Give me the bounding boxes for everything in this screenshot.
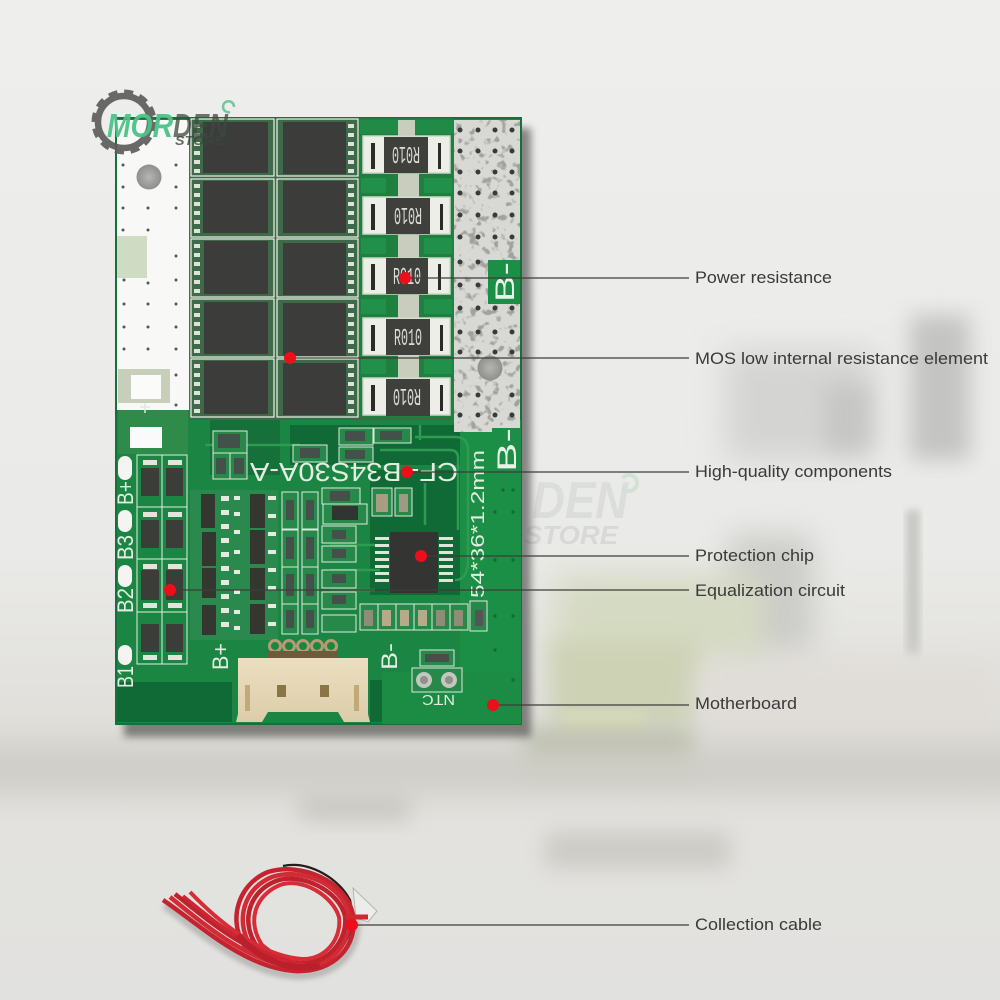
- board code text: [113, 450, 488, 708]
- board code text: 54*36*1.2mm: [468, 450, 488, 598]
- black wire: [283, 865, 352, 967]
- collection cable: [163, 865, 377, 975]
- B- silkscreen labels: B-: [490, 262, 520, 302]
- JST connector: [236, 640, 370, 722]
- power resistors: R010: [393, 265, 421, 292]
- PCB base: [115, 117, 522, 725]
- circuit board: [113, 117, 522, 725]
- board code text: B1: [113, 666, 138, 688]
- board code text: NTC: [422, 691, 455, 708]
- label: Collection cable: Collection cable: [695, 916, 822, 934]
- B- silkscreen labels: [490, 262, 522, 472]
- logo gear: [94, 92, 154, 152]
- board code text: B+: [113, 481, 138, 505]
- MOSFET array: [191, 119, 358, 417]
- board code text: B-: [377, 643, 402, 670]
- leader lines: [170, 278, 689, 925]
- red marker dots: [164, 272, 499, 931]
- silver contact panel: [454, 120, 521, 474]
- left solder pads: [118, 456, 132, 665]
- faint watermark: MORDEN STORE: DEN: [532, 472, 629, 530]
- board code text: CF- B34S30A-A: [249, 457, 458, 487]
- label: Motherboard: Motherboard: [695, 695, 797, 713]
- faint watermark: MORDEN STORE: STORE: [524, 520, 619, 550]
- power resistors: [360, 118, 453, 418]
- board code text: B3: [113, 535, 138, 560]
- faint watermark: MORDEN STORE: [524, 472, 637, 550]
- copper traces around chip: [205, 425, 468, 590]
- label: Power resistance: Power resistance: [695, 269, 832, 287]
- board via dots: [493, 488, 515, 682]
- protection chip: [375, 532, 453, 593]
- cable connector: [353, 888, 377, 922]
- balance MOS and SMD group: [190, 490, 278, 640]
- power resistors: R010: [393, 381, 421, 408]
- board code text: B+: [208, 643, 233, 670]
- cable shadow: [165, 905, 356, 975]
- power resistors: R010: [392, 139, 420, 166]
- logo sub word: STORE: [175, 133, 224, 148]
- power resistors: R010: [394, 200, 422, 227]
- label: Protection chip: Protection chip: [695, 547, 814, 565]
- red wires: [163, 869, 368, 971]
- label: Equalization circuit: Equalization circuit: [695, 582, 845, 600]
- logo arrow: [223, 101, 234, 112]
- small SMD components: [213, 428, 487, 692]
- white metal strip: [117, 120, 189, 410]
- board code text: B2: [113, 588, 138, 613]
- logo word: MOR: [107, 107, 173, 144]
- B- silkscreen labels: B-: [492, 428, 522, 472]
- label: High-quality components: High-quality components: [695, 463, 892, 481]
- board drop shadow: [124, 128, 531, 737]
- balance resistor grid: [137, 455, 187, 664]
- LED pads: [118, 369, 170, 403]
- logo: MORDEN STORE: DEN: [173, 107, 229, 144]
- label: MOS low internal resistance element: MOS low internal resistance element: [695, 350, 988, 368]
- logo: MORDEN STORE: [94, 92, 234, 152]
- power resistors: R010: [394, 326, 422, 353]
- dark copper zones: [117, 420, 475, 722]
